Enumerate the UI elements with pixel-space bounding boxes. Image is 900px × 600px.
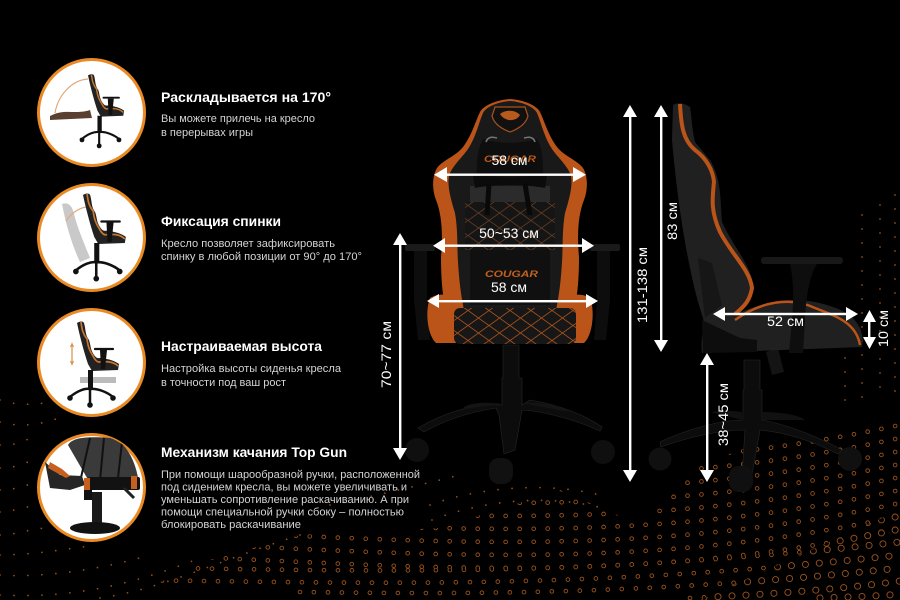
dimension labels: 131-138 см xyxy=(634,247,650,323)
icon: reclining chair xyxy=(38,60,144,166)
description: Настройка высоты сиденья кресла xyxy=(161,363,342,375)
side chair base xyxy=(648,348,862,492)
description: спинку в любой позиции от 90° до 170° xyxy=(161,251,362,263)
description xyxy=(161,363,342,389)
chair base xyxy=(405,345,615,484)
dotted background pattern xyxy=(0,195,900,598)
description: Вы можете прилечь на кресло xyxy=(161,113,315,125)
feature 2: back lock xyxy=(38,184,362,290)
chair seat xyxy=(427,295,593,344)
dimension labels: 58 см xyxy=(491,152,528,168)
left armrest xyxy=(405,244,435,340)
icon: height adjust chair xyxy=(38,310,144,416)
arrow: back width xyxy=(433,238,594,253)
description: под сидением кресла, вы можете увеличивать и xyxy=(161,482,407,494)
headrest pillow xyxy=(477,137,543,178)
dimension labels: 58 см xyxy=(491,279,527,295)
description: помощи специальной ручки сбоку – полностью xyxy=(161,506,404,518)
heading: Настраиваемая высота xyxy=(161,338,322,354)
description: уменьшать сопротивление раскачиванию. А при xyxy=(161,494,409,506)
arrow: seat height side xyxy=(700,353,714,482)
dimension arrows xyxy=(393,105,876,482)
dimension labels xyxy=(378,152,891,446)
dimension labels: 38~45 см xyxy=(715,383,731,446)
heading: Фиксация спинки xyxy=(161,213,281,229)
chair back: COUGAR xyxy=(485,269,539,279)
logo shield xyxy=(492,107,528,132)
arrow: seat width xyxy=(427,294,598,308)
dimension labels: 70~77 см xyxy=(378,321,394,388)
description: Кресло позволяет зафиксировать xyxy=(161,238,335,250)
side chair body xyxy=(672,103,863,353)
headrest pillow: COUGAR xyxy=(484,154,537,164)
dimension labels: 50~53 см xyxy=(479,225,539,241)
feature 1: reclining xyxy=(38,60,331,166)
description xyxy=(161,469,420,531)
right armrest xyxy=(590,244,620,340)
heading: Раскладывается на 170° xyxy=(161,89,331,105)
side armrest xyxy=(761,257,843,353)
icon: back lock chair xyxy=(38,184,144,290)
description: При помощи шарообразной ручки, расположенной xyxy=(161,469,420,481)
arrow: full height xyxy=(623,105,637,482)
icon: Top Gun mechanism closeup xyxy=(38,434,144,540)
description: блокировать раскачивание xyxy=(161,519,301,531)
dimension labels: 52 см xyxy=(767,313,804,329)
lumbar pillow xyxy=(473,175,547,215)
dimension labels: 83 см xyxy=(664,202,680,240)
dimension labels: 10 см xyxy=(875,310,891,347)
arrow: back height xyxy=(654,105,668,352)
arrow: shoulder width xyxy=(434,167,586,182)
front view chair xyxy=(405,99,620,484)
description: в точности под ваш рост xyxy=(161,377,286,389)
arrow: seat to floor height xyxy=(393,233,407,460)
feature 4: Top Gun xyxy=(38,434,420,540)
chair back xyxy=(433,99,587,310)
feature 3: height xyxy=(38,310,342,416)
arrow: seat thickness xyxy=(863,310,876,349)
side view chair xyxy=(648,103,863,492)
description xyxy=(161,113,315,139)
heading: Механизм качания Top Gun xyxy=(161,444,347,460)
description: в перерывах игры xyxy=(161,127,253,139)
arrow: seat depth xyxy=(713,307,858,321)
description xyxy=(161,238,362,263)
